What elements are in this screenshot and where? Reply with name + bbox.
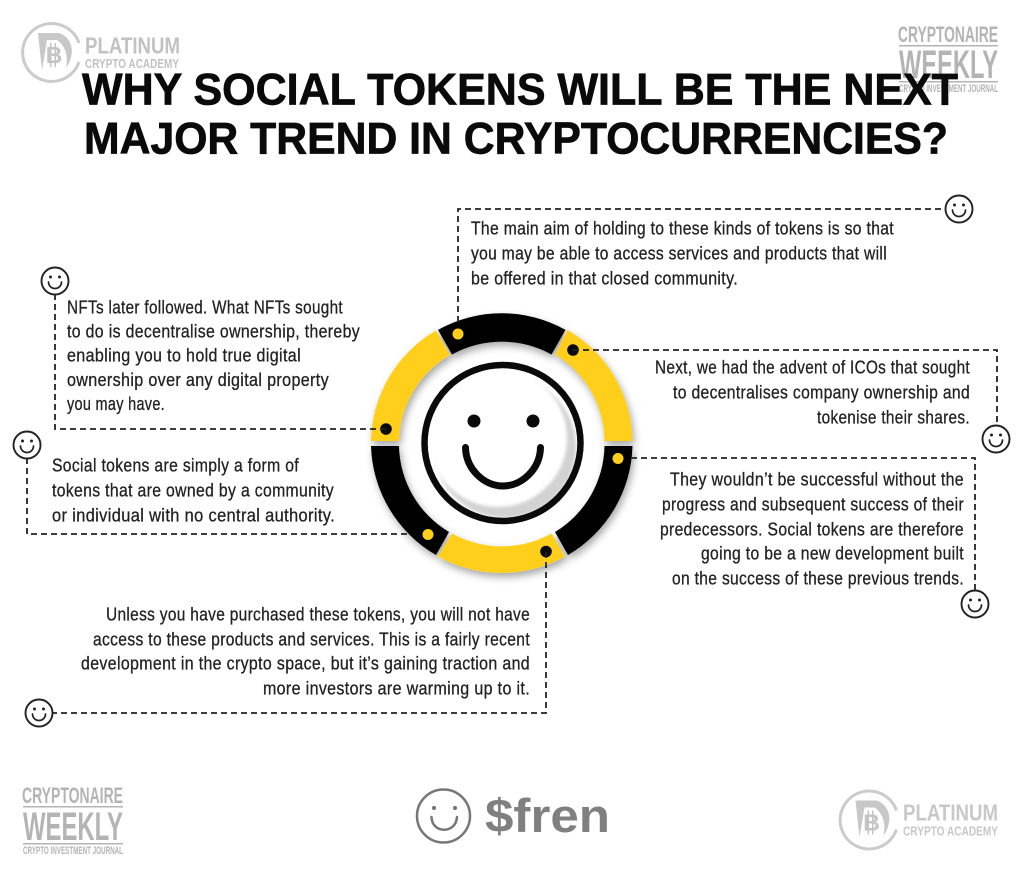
title: WHY SOCIAL TOKENS WILL BE THE NEXT xyxy=(82,66,958,114)
callout: definition of social tokens xyxy=(14,432,407,534)
callout: closed community access: be offered in that closed community. xyxy=(471,268,738,288)
callout: predecessors: on the success of these previous trends. xyxy=(672,568,964,588)
logo: Cryptonaire Weekly (bottom left): CRYPTONAIRE xyxy=(22,783,123,808)
callout: NFTs: enabling you to hold true digital xyxy=(67,344,301,366)
logo: Cryptonaire Weekly (top right) xyxy=(898,22,998,95)
callout: predecessors: going to be a new development built xyxy=(701,542,964,564)
logo: Cryptonaire Weekly (bottom left): WEEKLY xyxy=(23,805,123,849)
callout: predecessors: progress and subsequent success of their xyxy=(662,494,964,514)
logo: Platinum Crypto Academy (top left) xyxy=(23,24,180,82)
logo: Platinum Crypto Academy (bottom right) xyxy=(840,791,999,849)
callout: NFTs: you may have. xyxy=(67,393,165,414)
callout: NFTs: NFTs later followed. What NFTs sought xyxy=(67,296,343,318)
callout: closed community access: you may be able to access services and products that will xyxy=(471,242,887,264)
callout: purchase for access: Unless you have purchased these tokens, you will not have xyxy=(106,604,530,624)
logo: Platinum Crypto Academy (bottom right): CRYPTO ACADEMY xyxy=(903,824,999,838)
callout: definition of social tokens: Social tokens are simply a form of xyxy=(52,454,299,476)
logo: Platinum Crypto Academy (top left): PLATINUM xyxy=(85,32,180,58)
callout: ICOs: tokenise their shares. xyxy=(817,406,970,428)
logo: Platinum Crypto Academy (bottom right): PLATINUM xyxy=(903,800,998,826)
callout: purchase for access: more investors are warming up to it. xyxy=(263,678,530,698)
callout: definition of social tokens: or individual with no central authority. xyxy=(52,504,335,526)
callout: definition of social tokens: tokens that are owned by a community xyxy=(52,480,334,500)
callout: closed community access xyxy=(458,196,972,322)
central ring with smiley xyxy=(371,313,632,573)
logo: $fren: $fren xyxy=(485,789,610,842)
smiley face xyxy=(424,365,580,521)
logo: $fren xyxy=(417,789,610,842)
callout: predecessors: predecessors. Social tokens are therefore xyxy=(660,518,964,540)
callout: predecessors xyxy=(631,458,988,618)
callout: purchase for access: development in the crypto space, but it’s gaining traction and xyxy=(81,652,530,674)
callout: purchase for access: access to these products and services. This is a fairly recent xyxy=(93,628,530,650)
callout: predecessors: They wouldn’t be successful without the xyxy=(670,468,964,490)
logo: Platinum Crypto Academy (top left): CRYPTO ACADEMY xyxy=(85,57,180,71)
callout: NFTs xyxy=(42,268,386,429)
callout: ICOs xyxy=(573,350,1010,452)
callout: ICOs: to decentralises company ownership and xyxy=(673,382,970,402)
logo: Cryptonaire Weekly (bottom left) xyxy=(22,783,123,857)
logo: Cryptonaire Weekly (bottom left): CRYPTO INVESTMENT JOURNAL xyxy=(23,845,123,857)
callout: NFTs: to do is decentralise ownership, thereby xyxy=(67,320,360,342)
ring connector dots xyxy=(380,328,624,557)
callout: NFTs: ownership over any digital property xyxy=(67,369,329,390)
callout: purchase for access xyxy=(26,552,546,726)
title xyxy=(82,66,958,164)
title: MAJOR TREND IN CRYPTOCURRENCIES? xyxy=(84,114,948,164)
callout: closed community access: The main aim of holding to these kinds of tokens is so that xyxy=(471,218,894,238)
